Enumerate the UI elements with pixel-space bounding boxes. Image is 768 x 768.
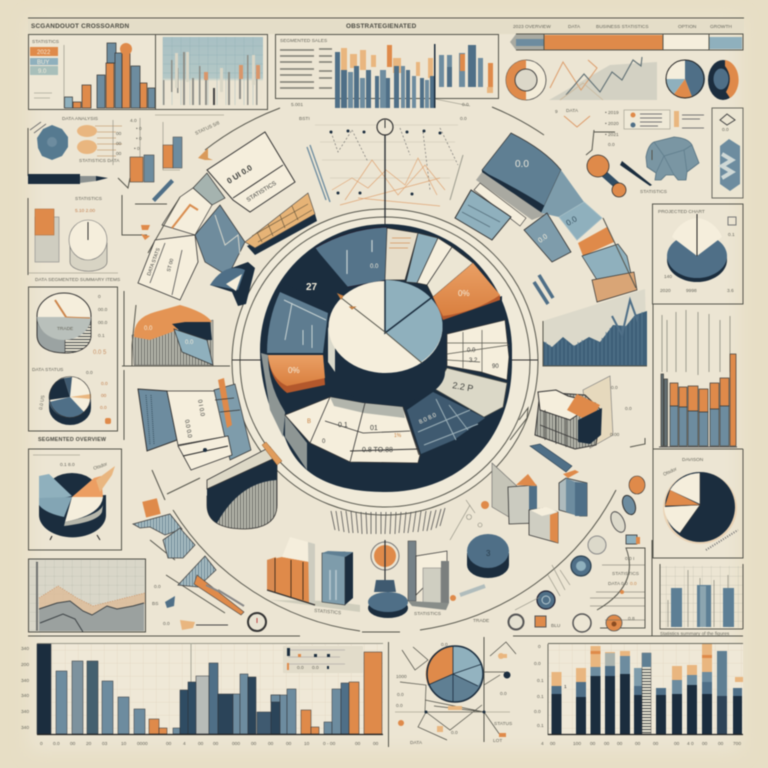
x labels: 00 (617, 741, 623, 747)
small left icons row: • 0 (134, 146, 140, 152)
panel: navy pie chart (653, 449, 743, 558)
panel: gauge and orange block: DATA SEGMENTED SUMMARY ITEMS (35, 277, 120, 283)
cylinder cutaway (510, 376, 632, 449)
panel: left cylinder and pie: 0 (98, 294, 101, 300)
orange disc on stand (368, 540, 408, 618)
3D orange block: STATISTICS (314, 608, 341, 616)
stacked sheets: 0 I 0.0 (196, 399, 205, 417)
icon: pen (620, 161, 667, 195)
panel: gauge pie right: 2020 (660, 288, 671, 294)
x labels: 00 (635, 741, 641, 747)
small left icons row: 00 (116, 131, 122, 137)
icon: orange key (587, 155, 626, 197)
bottom network pie: STATUS (494, 721, 512, 727)
x axis labels (40, 741, 379, 747)
chevrons tool: 0.0 (154, 584, 161, 590)
pencil (530, 444, 572, 472)
sector: navy data table: 8.0 8.0 (418, 412, 438, 426)
small left icons row: • 0 (136, 126, 142, 132)
outer arcs (122, 107, 645, 631)
x labels: 100 (573, 741, 581, 747)
small paired bars: STATUS 5/8 (194, 120, 221, 137)
panel: grid column chart (156, 34, 268, 110)
panel: left cylinder and pie (28, 287, 118, 431)
sector: cream bottom table: 1% (394, 433, 402, 439)
sector: cream bottom table: 01 (370, 425, 378, 432)
sector: navy 27 (282, 248, 348, 307)
panel: gauge pie right: 3.6 (727, 288, 734, 294)
sector: orange left (268, 355, 325, 412)
panel: left cylinder and pie: 0.0 (100, 405, 107, 411)
chevrons tool: BS (152, 601, 158, 607)
scale labels lower right: STATISTICS (612, 571, 639, 577)
y labels: 0.0 (534, 661, 541, 667)
icon column right (508, 476, 645, 632)
top-right progress bar (510, 34, 743, 50)
y axis labels: 340 (21, 693, 29, 699)
top-right fan: blue cards: 0.0 (564, 214, 579, 228)
x axis labels: 00 (268, 741, 274, 747)
network connectors (400, 642, 516, 740)
bottom network pie: 1000 (396, 674, 407, 680)
stacked sheets: 0.0 0.0 (183, 419, 192, 439)
header bar with titles: OBSTRATEGIENATED (346, 23, 417, 30)
sector: cream bottom table: 0.8 TO.88 (362, 447, 393, 454)
y labels: 0.1 (537, 723, 544, 729)
panel: wedge pie left: Otsdor (93, 461, 109, 472)
small left icons row: DATA ANALYSIS (62, 116, 98, 122)
scale labels lower right: DATA 0.0 (608, 581, 628, 587)
sector: slate top (315, 227, 387, 288)
panel: stacked hex icon (712, 108, 743, 198)
panel: table and stacked bars: 5.001 (291, 102, 303, 108)
icon: orange star (198, 148, 213, 160)
top-right fan: slate sector: 0.0 (515, 159, 529, 170)
block B (529, 508, 558, 543)
y labels: 0.1 (537, 678, 544, 684)
scale labels lower right (590, 556, 645, 628)
panel: gauge pie right: 140 (664, 274, 672, 280)
panel: left cylinder and pie: 0.1 (98, 333, 105, 339)
striped cylinder pie (37, 293, 91, 353)
mini notes row: • 2019 (605, 110, 619, 116)
sector: orange right (433, 263, 502, 333)
header bar with titles (28, 18, 744, 30)
sector: orange right: 0% (458, 289, 470, 298)
top-left fan: slate panels: ST 00 (166, 258, 175, 273)
x axis labels: 00 (355, 741, 361, 747)
dotted trend chart: 0.0 (460, 116, 467, 122)
stacked bars group (335, 44, 436, 108)
bottom network pie: 0.0 (451, 730, 458, 736)
sector: cream bottom table: B (307, 419, 311, 425)
x axis labels: 00 (373, 741, 379, 747)
section title left: SEGMENTED OVERVIEW (38, 437, 107, 443)
x labels: 00 (550, 741, 556, 747)
panel: table and stacked bars: 0.0 (462, 102, 469, 108)
area chart right of ring (543, 289, 647, 366)
x labels: 4 (541, 741, 544, 747)
panel: left cylinder and pie: 0.0 US (38, 395, 47, 410)
panel: top-left bar chart: STATISTICS (32, 39, 59, 45)
central ring background (232, 200, 538, 515)
top-left fan: slate panels (138, 173, 255, 306)
panel: left cylinder and pie: 00.0 (98, 307, 108, 313)
table rows (280, 49, 332, 88)
header bar with titles: GROWTH (710, 24, 732, 30)
navy cylinder: 3 (486, 549, 491, 558)
y labels: 0.1 (537, 694, 544, 700)
panel: orange stacked column chart (653, 304, 743, 449)
small left icons row: • 0 (136, 136, 142, 142)
mini notes row (555, 108, 619, 155)
panel: top-left bar chart (28, 34, 156, 110)
y labels: 0 (538, 644, 541, 650)
pie blue wedge (385, 280, 443, 362)
x labels (541, 741, 741, 747)
small left icons row (28, 115, 224, 176)
sector: navy 27: 27 (306, 282, 318, 293)
x axis labels: 00 (213, 741, 219, 747)
chevrons tool (133, 498, 244, 630)
legend box: 0.0 (312, 665, 319, 671)
y labels: 0.0 (534, 709, 541, 715)
panel: left cylinder and pie: 00 (101, 393, 107, 399)
sector: right table (447, 320, 509, 380)
small callouts near grey bars: TRADE (473, 618, 489, 624)
mini notes row: 9 (555, 109, 558, 115)
panel: gauge and orange block: 5.10 2.00 (75, 208, 95, 214)
small callouts near grey bars (450, 500, 489, 624)
x labels: 00 (653, 741, 659, 747)
y axis labels: 200 (21, 662, 29, 668)
orange stick (262, 442, 282, 465)
orange dome cylinder: 0.0 (144, 326, 153, 332)
bars (37, 644, 382, 734)
grey upright bars (408, 541, 449, 617)
pencil and 3D blocks (492, 444, 587, 543)
mini notes row: 0.0 (608, 142, 615, 148)
mini notes row: • 2020 (605, 121, 619, 127)
dotted trend chart: BSTI (299, 116, 310, 122)
x axis labels: 0000 (137, 741, 148, 747)
oval rows (77, 125, 97, 137)
orange dome cylinder (132, 305, 213, 366)
bottom network pie: DATA (410, 740, 423, 746)
x axis labels: 00 (198, 741, 204, 747)
icon: marker stick (118, 178, 174, 204)
legend chips: 2022 (37, 50, 51, 56)
legend box (283, 646, 363, 673)
note cards (624, 110, 704, 129)
bars (64, 43, 155, 108)
cylinder cutaway: 0.0 (611, 385, 618, 391)
ruler tick fan (331, 508, 445, 534)
panel: gauge pie right: 0.1 (728, 232, 735, 238)
icon: small ring dial (248, 613, 266, 631)
legend chips (30, 47, 58, 75)
x labels: 00 (604, 741, 610, 747)
sector: slate top: 0.0 (370, 264, 379, 270)
legend chips: BUY (37, 60, 49, 66)
pie top cream (328, 281, 442, 373)
legend box: 0.0 (297, 665, 304, 671)
small left icons row: 00 (116, 151, 122, 157)
icon: pen: STATISTICS (640, 189, 667, 195)
scale labels lower right: 0.0 I (625, 556, 634, 562)
icon: orange marker (120, 43, 132, 55)
central disc base (260, 224, 512, 492)
header bar with titles: OPTION (678, 24, 697, 30)
top-left fan: text cards: STATISTICS (246, 181, 278, 204)
stacked columns (552, 644, 743, 734)
x labels: 4 0 (687, 741, 694, 747)
x axis labels: 000 (232, 741, 240, 747)
panel: left cylinder and pie: 0.0 5 (93, 350, 107, 356)
panel: left cylinder and pie: 00.0 (98, 320, 108, 326)
bottom network pie: 0.0 (397, 692, 404, 698)
panel: gauge pie right (652, 204, 743, 304)
block C (559, 478, 587, 516)
sector: right table: 0.0 (467, 348, 476, 354)
bottom network pie: 0.0 (396, 703, 403, 709)
panel: navy pie chart: DAVISON (682, 457, 704, 463)
y labels (534, 644, 544, 729)
y axis labels: 340 (21, 709, 29, 715)
header bar with titles: DATA (568, 24, 581, 30)
x labels: 00 (718, 741, 724, 747)
legend chips: 9.0 (38, 69, 47, 75)
y axis labels (21, 646, 29, 731)
x labels: 00 (674, 741, 680, 747)
mini notes row: DATA (566, 108, 579, 114)
sector: cream bottom table: 0.1 (338, 422, 348, 429)
panel: gauge and orange block (28, 195, 150, 283)
bottom network pie (388, 637, 516, 747)
top-left fan: slate panels: DATA STATS (146, 247, 162, 277)
x axis labels: 0.0 (53, 741, 60, 747)
panel: gauge and orange block: STATISTICS (75, 196, 102, 202)
cylinder cutaway: 0.0 (625, 406, 632, 412)
small left icons row: 4.0 (130, 118, 137, 124)
sector: cream bottom table (285, 397, 420, 463)
second bar group (439, 45, 493, 93)
striped cylinder pie: TRADE (57, 326, 73, 332)
panel: navy pie chart: Otsdor (662, 466, 678, 478)
bottom network pie: 0.0 (441, 642, 448, 648)
top-right fan: blue cards (455, 190, 637, 304)
sector: slate left (267, 292, 328, 353)
dotted trend chart (299, 116, 467, 206)
x axis labels: 4 (183, 741, 186, 747)
panel: slate bar chart bottom right (660, 564, 743, 637)
x axis labels: 03 (102, 741, 108, 747)
grey upright bars: STATISTICS (414, 611, 441, 617)
sector: orange left: 0% (288, 366, 300, 375)
panel: gauge pie right: 9998 (686, 288, 697, 294)
x axis labels: 20 (86, 741, 92, 747)
thin columns (163, 52, 258, 105)
panel: line chart (28, 559, 146, 632)
navy cylinder (467, 534, 509, 578)
top-left fan: orange ruler (245, 193, 317, 255)
bottom network pie: LOT (493, 738, 502, 744)
panel: gauge pie right: PROJECTED CHART (658, 209, 705, 215)
navy pie (49, 376, 91, 425)
3D blue block (322, 551, 353, 605)
zigzag line chart (549, 57, 657, 100)
header bar with titles: 2023 OVERVIEW (513, 24, 551, 30)
top-right fan: slate sector (474, 133, 584, 226)
small left icons row: 00 (116, 141, 122, 147)
icon: pie chart (666, 60, 705, 98)
header bar with titles: SCGANDOUOT CROSSOARDN (31, 23, 129, 30)
panel: left cylinder and pie: DATA STATUS (32, 367, 63, 373)
x labels: 00 (590, 741, 596, 747)
mini notes row: • 2021 (605, 132, 619, 138)
sector: cream bottom table: 0 (322, 439, 326, 445)
divider lines bottom (28, 150, 743, 636)
icon: orange donut (506, 60, 546, 100)
x axis labels: 10 (121, 741, 127, 747)
y axis labels: 340 (21, 646, 29, 652)
panel: wedge pie left: 0.1 8.0 (60, 462, 75, 468)
central pie cylinder (328, 280, 445, 403)
striped cylinder with navy band (207, 442, 282, 529)
panel: wedge pie left (28, 449, 122, 550)
x axis labels: 00 (251, 741, 257, 747)
scale labels lower right: 0.8 (628, 616, 635, 622)
header bar with titles: BUSINESS STATISTICS (596, 24, 649, 30)
panel: table and stacked bars: SEGMENTED SALES (280, 38, 327, 44)
panel: slate bar chart bottom right: Statistics summary of the figures (660, 631, 730, 637)
panel: left cylinder and pie: 0.0 (101, 381, 108, 387)
icon: dark ring (708, 60, 739, 100)
x axis labels: 10 (304, 741, 310, 747)
bottom-right stacked bar chart: 1 (564, 684, 567, 690)
small left icons row: STATISTICS DATA (79, 158, 120, 164)
sector: right table: 3.2 (469, 358, 478, 364)
y axis labels: 340 (21, 725, 29, 731)
gauge pointer (377, 119, 393, 218)
icon: faceted elephant (646, 137, 699, 180)
scale labels lower right: 0.0 (630, 581, 637, 587)
top-right fan: blue cards: 0.0 (537, 233, 549, 245)
x labels: 00 (702, 741, 708, 747)
x axis labels: 00 (70, 741, 76, 747)
x axis labels: 00 (286, 741, 292, 747)
bottom network pie: 0.0 (500, 691, 507, 697)
stacked sheets (138, 378, 251, 470)
sector: navy data table (407, 392, 485, 454)
sector: grey text band (435, 368, 507, 417)
panel: left cylinder and pie: 0.0 (86, 370, 93, 376)
top-left fan: text cards (207, 132, 295, 212)
x axis labels: 00 (166, 741, 172, 747)
icon: gear (37, 125, 68, 160)
sector: right table: 90 (492, 364, 499, 370)
pie marker (338, 294, 355, 309)
x labels: 700 (733, 741, 741, 747)
block A (492, 463, 519, 523)
icon: pen (28, 174, 108, 184)
panel: table and stacked bars (276, 34, 498, 108)
bottom bar chart (21, 643, 383, 747)
3D orange block (267, 537, 360, 616)
bottom-right stacked bar chart (534, 644, 743, 747)
orange dome cylinder: 0.0 (185, 340, 194, 346)
sectors: top right wedges (385, 228, 473, 297)
cylinder cutaway: 0.00 (610, 432, 620, 438)
sector: grey text band: 2.2 P (452, 380, 474, 394)
x axis labels: 0 - 00 (323, 741, 336, 747)
x axis labels: 0 (40, 741, 43, 747)
small paired bars (130, 120, 221, 182)
y axis labels: 340 (21, 678, 29, 684)
top-left fan: text cards: 0 UI 0.0 (225, 163, 254, 186)
icon column right: BLU (551, 623, 561, 629)
panel: stacked hex icon: 0.0 (722, 127, 729, 133)
chevrons tool: 0.0 (163, 621, 170, 627)
